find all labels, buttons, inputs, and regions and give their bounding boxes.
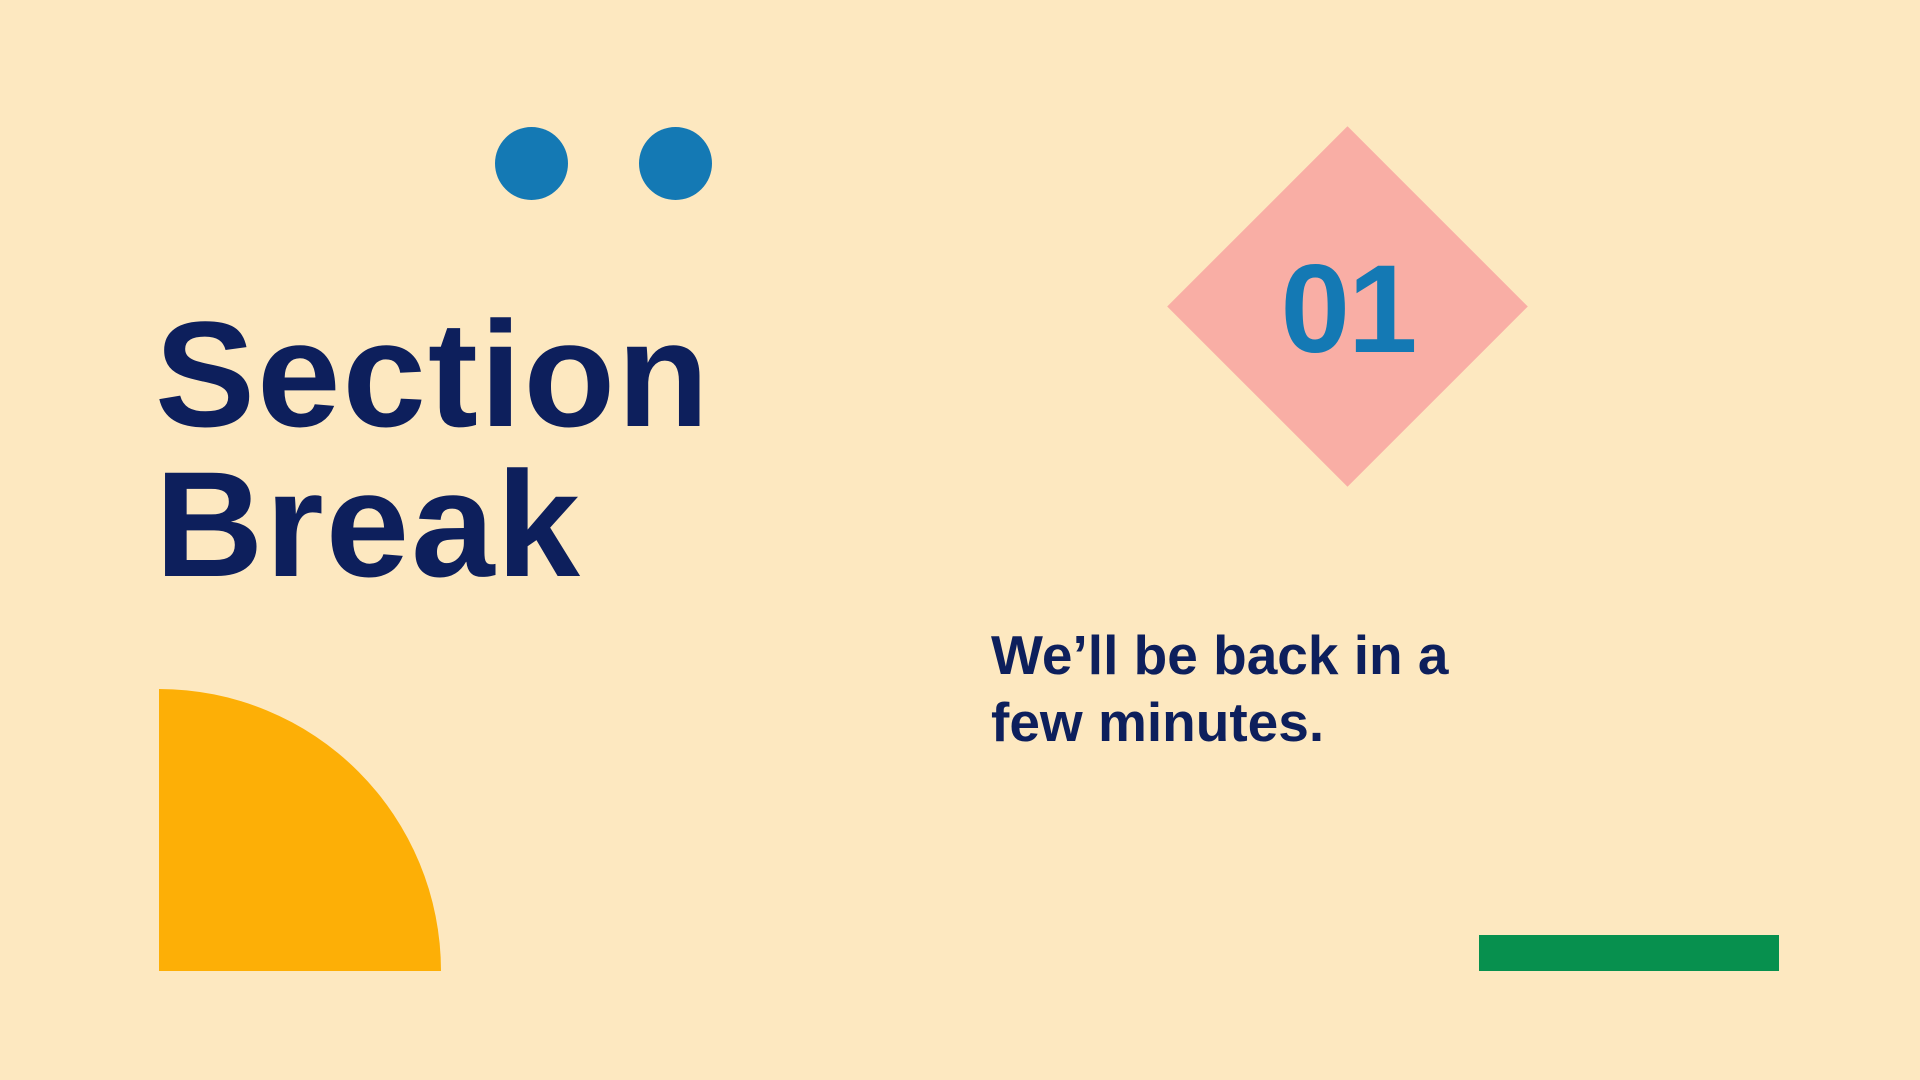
green bar — [1479, 935, 1779, 971]
number 01: 01 — [1280, 240, 1416, 379]
title: Section — [155, 290, 711, 458]
title: Break — [155, 440, 582, 608]
subtitle text: We’ll be back in a few minutes. — [991, 624, 1448, 753]
icon: blue dot left — [495, 127, 568, 200]
pink diamond with number — [1167, 126, 1528, 486]
icon: blue dot right — [639, 127, 712, 200]
orange quarter circle — [159, 689, 441, 971]
diamond shape — [1167, 126, 1528, 487]
title — [155, 290, 711, 608]
